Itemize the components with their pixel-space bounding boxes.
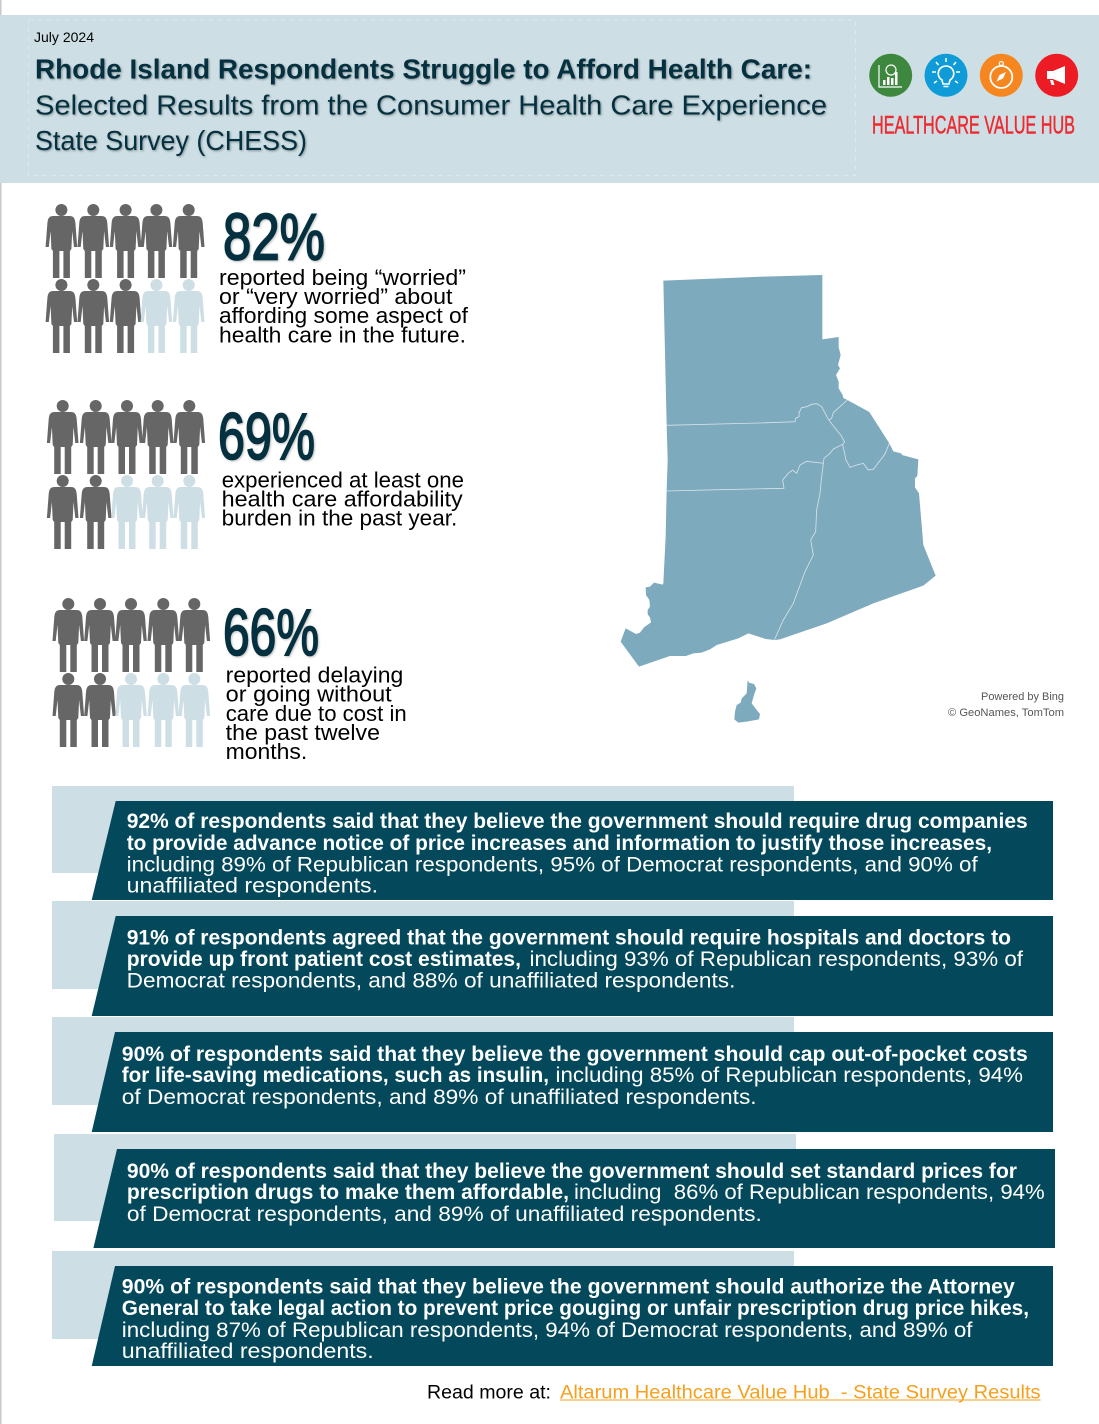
text: delaying care: months. bbox=[226, 739, 307, 764]
text: worried about affording care: reported being “worried” bbox=[219, 265, 466, 290]
callout 4: standard prescription prices: of Democrat respondents, and 89% of unaffiliated respondents. bbox=[127, 1202, 762, 1226]
footer: read more link: Altarum Healthcare Value Hub - State Survey Results bbox=[560, 1382, 1041, 1403]
title: Rhode Island Respondents Struggle to Afford Health Care: bbox=[35, 53, 812, 84]
callout 2: up front cost estimates: including 93% of Republican respondents, 93% of bbox=[530, 947, 1023, 971]
text: worried about affording care bbox=[219, 265, 469, 348]
callout 3: cap out-of-pocket costs: for life-saving medications, such as insulin, bbox=[122, 1063, 549, 1087]
callout 3: cap out-of-pocket costs: including 85% of Republican respondents, 94% bbox=[556, 1063, 1023, 1087]
callout 1: drug price notices: including 89% of Republican respondents, 95% of Democrat respondents, and 90% of bbox=[127, 853, 978, 877]
text: delaying care: care due to cost in bbox=[226, 701, 407, 726]
text: worried about affording care: affording some aspect of bbox=[219, 303, 469, 328]
callout 4: standard prescription prices bbox=[54, 1134, 1055, 1248]
callout 2: up front cost estimates: 91% of respondents agreed that the government should require hospitals and doctors to bbox=[127, 926, 1011, 950]
callout 3: cap out-of-pocket costs bbox=[52, 1017, 1053, 1132]
icon: red megaphone bbox=[1035, 54, 1078, 97]
map: Rhode Island counties bbox=[621, 275, 936, 723]
callout 2: up front cost estimates bbox=[52, 901, 1053, 1016]
pictogram: 8 of 10 people bbox=[46, 204, 204, 353]
map credit: © GeoNames, TomTom bbox=[948, 707, 1064, 719]
icon: green chart bbox=[869, 54, 912, 97]
callout 1: drug price notices bbox=[52, 786, 1053, 900]
figure 69%: 69% bbox=[218, 399, 315, 473]
title bbox=[35, 53, 827, 156]
icon: orange compass bbox=[980, 54, 1023, 97]
figure 82%: 82% bbox=[223, 200, 325, 274]
text: affordability burden bbox=[222, 468, 464, 530]
callout 1: drug price notices: to provide advance notice of price increases and information to justify those increases, bbox=[127, 831, 992, 855]
callout 3: cap out-of-pocket costs: 90% of respondents said that they believe the government should cap out-of-pocket costs bbox=[122, 1042, 1028, 1066]
text: worried about affording care: or “very worried” about bbox=[219, 284, 453, 309]
callout 5: price gouging legal action: unaffiliated respondents. bbox=[122, 1339, 374, 1363]
text: delaying care: or going without bbox=[226, 682, 392, 707]
callout 4: standard prescription prices: 90% of respondents said that they believe the government should set standard prices for bbox=[127, 1159, 1018, 1183]
title: Selected Results from the Consumer Health Care Experience bbox=[35, 89, 827, 120]
footer: read more link: Read more at: bbox=[427, 1382, 551, 1403]
callout 2: up front cost estimates: provide up front patient cost estimates, bbox=[127, 947, 521, 971]
figure 66%: 66% bbox=[223, 595, 319, 669]
text: delaying care bbox=[226, 662, 407, 764]
title: State Survey (CHESS) bbox=[35, 125, 307, 156]
text: affordability burden: health care affordability bbox=[222, 487, 463, 512]
callout 4: standard prescription prices: including 86% of Republican respondents, 94% bbox=[574, 1180, 1045, 1204]
text: affordability burden: burden in the past year. bbox=[222, 506, 457, 531]
map credit: Powered by Bing bbox=[981, 691, 1064, 703]
callout 5: price gouging legal action: including 87% of Republican respondents, 94% of Democrat respondents, and 89% of bbox=[122, 1318, 973, 1342]
logo: Healthcare Value Hub bbox=[869, 54, 1078, 139]
icon: blue light bulb bbox=[924, 54, 968, 97]
callout 4: standard prescription prices: prescription drugs to make them affordable, bbox=[127, 1180, 569, 1204]
callout 5: price gouging legal action: General to take legal action to prevent price gouging or unfair prescription drug price hikes, bbox=[122, 1296, 1029, 1320]
pictogram: 7 of 10 people bbox=[53, 598, 210, 747]
date: July 2024 bbox=[34, 29, 94, 45]
stat block: 69% bbox=[47, 399, 464, 549]
callout 1: drug price notices: unaffiliated respondents. bbox=[127, 874, 378, 898]
text: worried about affording care: health care in the future. bbox=[219, 323, 466, 348]
callout 2: up front cost estimates: Democrat respondents, and 88% of unaffiliated respondents. bbox=[127, 969, 735, 993]
stat block: 66% bbox=[53, 595, 407, 764]
text: affordability burden: experienced at least one bbox=[222, 468, 464, 493]
callout 5: price gouging legal action bbox=[52, 1251, 1053, 1366]
stat block: 82% bbox=[46, 200, 469, 353]
header banner bbox=[0, 15, 1099, 183]
map credit bbox=[948, 691, 1064, 719]
callout 1: drug price notices: 92% of respondents said that they believe the government should require drug companies bbox=[127, 809, 1028, 833]
text: delaying care: the past twelve bbox=[226, 720, 380, 745]
callout 3: cap out-of-pocket costs: of Democrat respondents, and 89% of unaffiliated respondents. bbox=[122, 1085, 757, 1109]
pictogram: 7 of 10 people bbox=[47, 400, 205, 549]
callout 5: price gouging legal action: 90% of respondents said that they believe the government should authorize the Attorney bbox=[122, 1274, 1015, 1298]
text: delaying care: reported delaying bbox=[226, 663, 403, 688]
